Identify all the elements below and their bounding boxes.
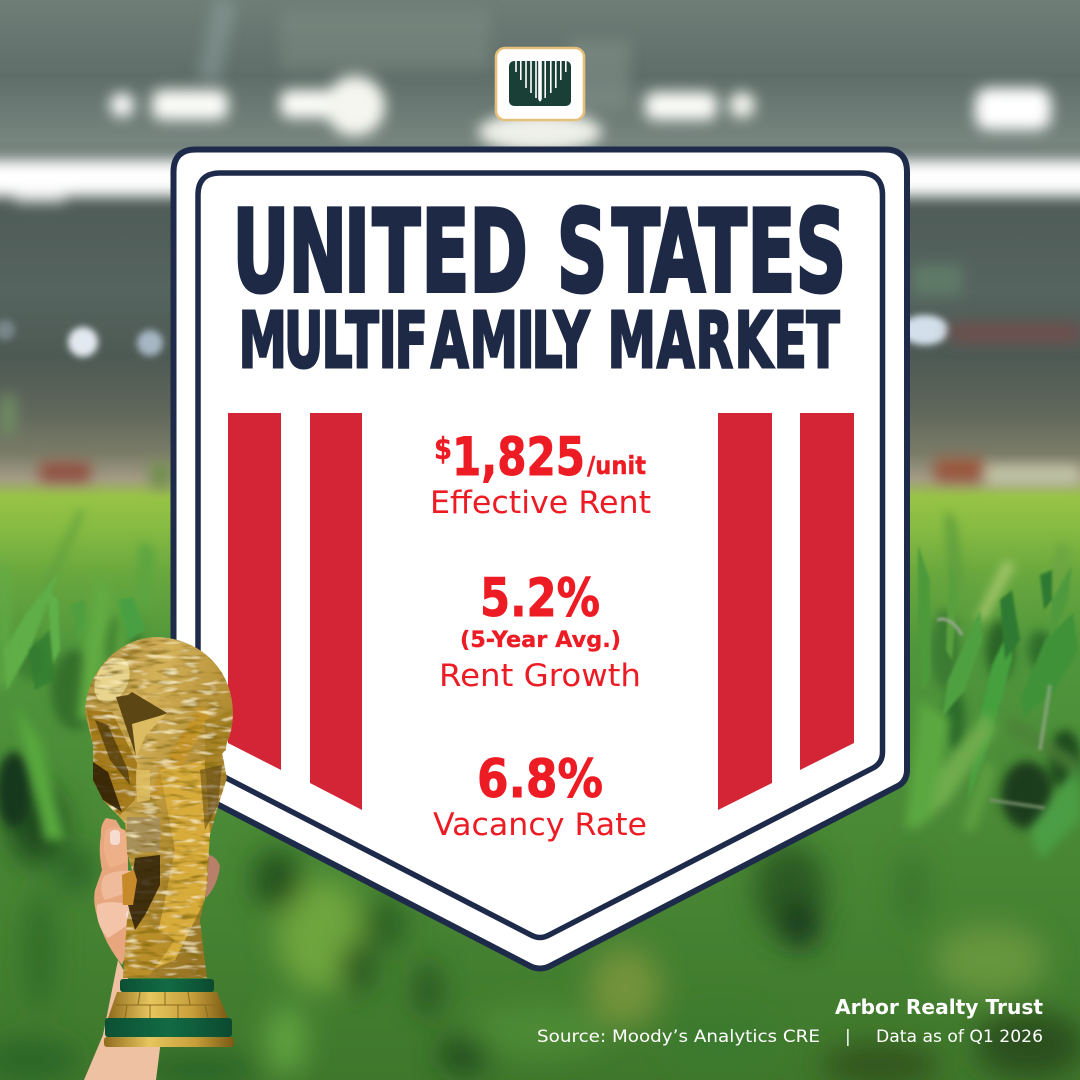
stat: effective rent: Effective Rent [430,485,651,521]
trophy dark recesses [93,692,222,930]
trophy base [104,979,234,1047]
logo mark [509,61,571,106]
red stripes right [718,413,854,810]
shield panel [174,150,907,968]
stat: effective rent [430,427,651,521]
stat: rent growth [439,568,641,694]
source: Source: Moody’s Analytics CRE [537,1027,820,1047]
title line 2: MULTIFAMILY MARKET [239,296,840,386]
red stripes left [228,413,362,810]
mid-ground grass blades [4,545,1078,800]
title [233,188,846,386]
stat: effective rent: 1,825 [452,427,585,488]
organisation name: Arbor Realty Trust [835,995,1043,1019]
stat: effective rent: /unit [587,451,646,480]
stat: vacancy rate: 6.8% [477,749,603,810]
stat: effective rent: $ [434,432,452,467]
stat: rent growth: 5.2% [480,568,600,629]
stat: vacancy rate: Vacancy Rate [433,807,647,843]
stadium lights [0,0,1080,202]
trophy body [85,637,233,978]
footer credit: | [845,1027,851,1047]
data date: Data as of Q1 2026 [876,1027,1043,1047]
logo badge [496,48,584,120]
distant stands [0,315,949,357]
footer credit [537,995,1043,1047]
stat: rent growth: (5-Year Avg.) [460,628,621,653]
stat: rent growth: Rent Growth [439,658,641,694]
title line 1: UNITED STATES [233,188,846,319]
blurred foreground grass [0,785,1080,1080]
dark gaps between grass [0,610,1080,829]
arm and hand [84,818,220,1080]
soft upper blades [38,508,1070,680]
trophy in hand [84,637,234,1080]
stat: vacancy rate [433,749,647,843]
